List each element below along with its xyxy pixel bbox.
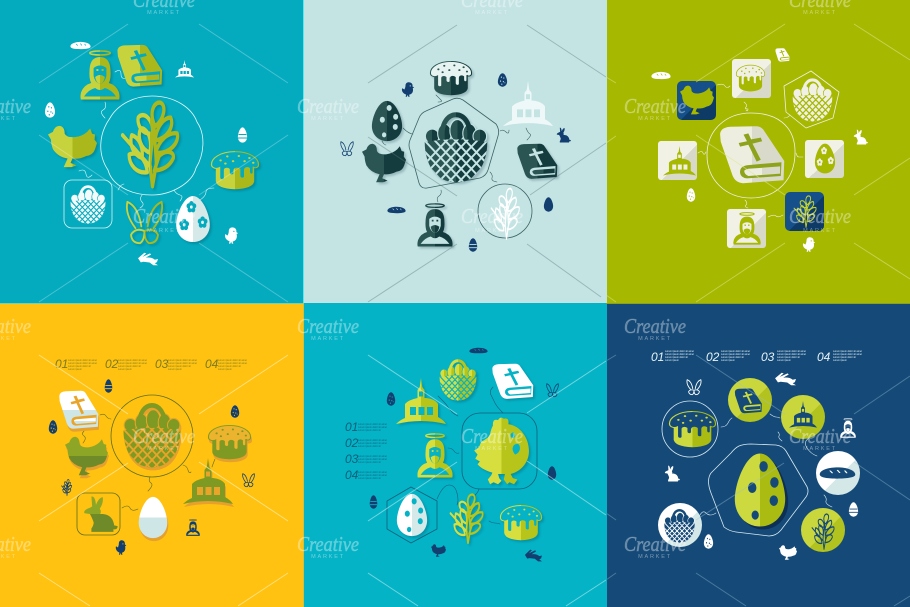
icon: egg — [548, 466, 556, 480]
icon: basket — [425, 361, 491, 404]
icon: hen — [779, 545, 797, 560]
box: cake — [732, 59, 771, 98]
icon: willow — [451, 495, 483, 543]
watermark row 3: MARKET — [475, 228, 509, 234]
watermark row 5: Creative — [461, 424, 523, 448]
item 02: Lorem ipsum — [721, 359, 735, 362]
item 03: Lorem ipsum dolor sit — [168, 365, 191, 368]
icon: willow — [61, 480, 72, 496]
icon: hen — [431, 544, 446, 557]
panel: teal willow branch — [0, 0, 303, 303]
icon: basket — [777, 80, 848, 125]
icon: chick — [225, 227, 238, 244]
item 02: Lorem ipsum dolor sit — [118, 365, 141, 368]
item 04 — [817, 350, 862, 364]
watermark row 2: Creative — [624, 94, 686, 118]
watermark row 3: Creative — [461, 204, 523, 228]
item 01: Lorem ipsum dolor sit — [358, 429, 381, 432]
frame with basket — [57, 180, 119, 228]
item 02: Lorem ipsum dolor sit amet — [721, 353, 750, 356]
item 02: Lorem ipsum dolor sit — [721, 356, 744, 359]
item 02 — [345, 436, 387, 450]
icon: rabbit — [557, 128, 571, 143]
item 03: Lorem ipsum dolor sit amet — [777, 350, 806, 353]
item 01: Lorem ipsum dolor sit amet — [665, 353, 694, 356]
item 02 — [706, 350, 750, 364]
item 04: Lorem ipsum dolor sit amet — [833, 353, 862, 356]
outline: central hexagon — [409, 98, 499, 188]
frame: hexagon — [708, 444, 808, 536]
box: Jesus — [727, 209, 766, 248]
box: church — [658, 141, 697, 180]
frame with rabbit — [77, 493, 120, 535]
item 03 — [761, 350, 806, 364]
watermark row 2: MARKET — [311, 116, 345, 122]
watermark row 3: MARKET — [803, 228, 837, 234]
item 01 — [345, 420, 387, 434]
item 02: 02 — [345, 436, 359, 450]
icon: Jesus — [186, 519, 200, 536]
icon: bunny — [243, 474, 254, 487]
icon: chick — [402, 82, 414, 97]
icon: egg — [387, 392, 395, 406]
watermark row 3: Creative — [133, 204, 195, 228]
outline: willow circle — [478, 184, 532, 238]
watermark row 4: Creative — [297, 314, 359, 338]
icon: willow — [491, 189, 519, 239]
icon: small book — [775, 48, 789, 62]
watermark row 4: Creative — [624, 314, 686, 338]
icon: bunny — [547, 384, 558, 397]
item 03: 03 — [155, 357, 169, 371]
item 01: 01 — [55, 357, 68, 371]
item 02: Lorem ipsum dolor sit amet — [721, 350, 750, 353]
icon: bunny — [341, 142, 353, 156]
item 03: Lorem ipsum — [777, 359, 791, 362]
icon: church — [503, 81, 553, 126]
watermark row 3: MARKET — [147, 228, 181, 234]
item 01: 01 — [651, 350, 664, 364]
icon: small egg — [45, 102, 55, 118]
watermark row 2: MARKET — [638, 116, 672, 122]
watermark row 1 — [133, 0, 851, 16]
watermark row 4: MARKET — [638, 336, 672, 342]
item 03: Lorem ipsum dolor sit — [777, 356, 800, 359]
icon: chick — [116, 540, 126, 555]
watermark row 3: Creative — [789, 204, 851, 228]
panel: green bible — [606, 0, 910, 303]
item 02: Lorem ipsum dolor sit amet — [358, 442, 387, 445]
item 04: Lorem ipsum dolor sit — [358, 477, 381, 480]
icon: bible — [117, 45, 162, 87]
watermark row 5: MARKET — [803, 446, 837, 452]
box: willow — [785, 192, 824, 231]
icon: cake — [669, 412, 716, 447]
item 03 — [345, 452, 387, 466]
item 01: 01 — [345, 420, 358, 434]
icon: big bible — [720, 126, 784, 183]
outline: central rounded frame — [707, 113, 795, 198]
icon: decorated egg — [176, 196, 210, 242]
icon: small church — [175, 60, 194, 77]
watermark row 6 — [0, 532, 686, 560]
item 04: 04 — [205, 357, 219, 371]
connectors — [82, 414, 215, 510]
item 01: Lorem ipsum dolor sit — [68, 365, 91, 368]
item 03: Lorem ipsum — [168, 368, 182, 371]
legend 01-04 — [55, 357, 247, 371]
legend 01-04 — [345, 420, 387, 482]
icon: egg — [397, 494, 427, 536]
item 04: 04 — [817, 350, 831, 364]
icon: willow branch — [123, 103, 178, 186]
item 01: Lorem ipsum — [665, 359, 679, 362]
watermark row 1: MARKET — [147, 10, 181, 16]
icon: bread — [387, 207, 406, 213]
panel background — [0, 0, 303, 303]
icon: egg — [704, 534, 713, 549]
item 04: Lorem ipsum dolor sit amet — [833, 350, 862, 353]
watermark row 6: MARKET — [311, 554, 345, 560]
item 04: 04 — [345, 468, 359, 482]
icon: spotted egg — [372, 101, 402, 141]
icon: church — [183, 458, 233, 504]
circle: bible — [728, 378, 772, 422]
icon: dotted egg — [498, 73, 507, 87]
item 01: Lorem ipsum dolor sit amet — [665, 350, 694, 353]
item 02: 02 — [706, 350, 720, 364]
box: egg — [805, 140, 844, 178]
item 01 — [651, 350, 694, 364]
item 02: Lorem ipsum dolor sit amet — [118, 359, 147, 362]
icon: rabbit — [854, 130, 868, 145]
item 04 — [205, 357, 247, 371]
watermark row 5 — [133, 424, 851, 452]
item 01 — [55, 357, 97, 371]
icon: Jesus — [417, 204, 453, 247]
panel background — [303, 303, 606, 607]
item 01: Lorem ipsum dolor sit amet — [68, 362, 97, 365]
icon: hen — [48, 126, 97, 167]
icon: Jesus — [80, 51, 120, 100]
icon: bunny — [127, 202, 162, 243]
item 01: Lorem ipsum dolor sit amet — [68, 359, 97, 362]
item 03: 03 — [761, 350, 775, 364]
item 02: Lorem ipsum — [118, 368, 132, 371]
watermark row 2 — [0, 94, 686, 122]
icon: Jesus — [840, 418, 856, 438]
watermark row 5: Creative — [789, 424, 851, 448]
icon: basket — [400, 115, 512, 187]
watermark row 6: MARKET — [638, 554, 672, 560]
icon: hen — [65, 437, 108, 475]
item 03: Lorem ipsum dolor sit amet — [168, 359, 197, 362]
panel background — [606, 303, 910, 607]
icon: hen — [362, 144, 406, 182]
panel: navy egg — [606, 303, 910, 607]
connectors — [79, 70, 214, 208]
connectors — [382, 95, 531, 202]
icon: big egg — [735, 454, 785, 526]
watermark row 2: Creative — [297, 94, 359, 118]
icon: cake — [500, 505, 542, 540]
item 04: Lorem ipsum dolor sit — [218, 365, 241, 368]
icon: Easter cake — [211, 152, 259, 189]
icon: egg — [49, 420, 57, 434]
watermark row 1: MARKET — [803, 10, 837, 16]
item 03: Lorem ipsum dolor sit amet — [777, 353, 806, 356]
icon: egg — [139, 497, 167, 538]
item 04: Lorem ipsum dolor sit amet — [358, 471, 387, 474]
panel: yellow basket — [0, 303, 303, 607]
outline: central blob frame — [101, 96, 203, 195]
watermark row 4 — [0, 314, 686, 342]
icon: bread — [651, 72, 671, 79]
item 01: Lorem ipsum dolor sit amet — [358, 426, 387, 429]
connectors — [437, 387, 503, 524]
icon: rabbit — [665, 466, 680, 481]
connectors — [698, 414, 832, 519]
item 04: Lorem ipsum dolor sit — [833, 356, 856, 359]
icon: egg — [231, 405, 239, 418]
icon: bible — [517, 144, 557, 179]
item 04: Lorem ipsum — [218, 368, 232, 371]
item 03: Lorem ipsum dolor sit amet — [168, 362, 197, 365]
icon: church — [396, 378, 446, 424]
watermark row 6: Creative — [624, 532, 686, 556]
panel background — [0, 303, 303, 607]
icons — [48, 45, 259, 243]
panel: teal chick — [303, 303, 606, 607]
icon: running rabbit — [775, 373, 796, 385]
icon: chick — [803, 237, 815, 252]
outline: basket hexagon — [784, 71, 839, 128]
item 04: Lorem ipsum dolor sit amet — [218, 359, 247, 362]
frame: cake circle — [662, 401, 718, 457]
circle: willow — [801, 508, 845, 552]
icon: rabbit — [525, 550, 542, 561]
icon: egg — [687, 188, 695, 202]
item 04: Lorem ipsum dolor sit amet — [358, 474, 387, 477]
icon: egg — [544, 197, 553, 212]
icon: bunny — [687, 380, 701, 395]
icon: cake — [208, 425, 251, 459]
watermark row 5: Creative — [133, 424, 195, 448]
watermark row 3 — [133, 204, 851, 234]
watermark row 4: MARKET — [311, 336, 345, 342]
circle: bread — [816, 451, 860, 495]
item 04 — [345, 468, 387, 482]
item 02: Lorem ipsum dolor sit — [358, 445, 381, 448]
icon: striped egg — [469, 238, 477, 252]
item 01: Lorem ipsum — [68, 368, 82, 371]
icon: basket — [101, 405, 203, 472]
icon: cake — [430, 61, 472, 95]
item 03: Lorem ipsum dolor sit amet — [358, 455, 387, 458]
icon: striped egg — [105, 379, 112, 393]
circle: church — [781, 395, 825, 439]
small white icons — [45, 42, 247, 265]
item 02: 02 — [105, 357, 119, 371]
frame: rounded square — [462, 413, 537, 489]
circle: basket — [652, 503, 707, 547]
watermark row 1: MARKET — [475, 10, 509, 16]
icon: bible — [59, 391, 98, 429]
watermark row 6: Creative — [297, 532, 359, 556]
small navy icons — [341, 73, 571, 252]
icon: bread — [70, 42, 91, 49]
watermark row 5: MARKET — [147, 446, 181, 452]
connectors — [698, 84, 803, 217]
icon: bible — [492, 364, 533, 399]
icon: striped egg — [370, 495, 377, 509]
panel background — [606, 0, 910, 303]
item 04: Lorem ipsum dolor sit amet — [218, 362, 247, 365]
outline: central circle — [111, 395, 193, 477]
icon: running rabbit — [138, 253, 158, 265]
icon: Jesus — [417, 434, 453, 478]
item 03 — [155, 357, 197, 371]
icon: large chick — [474, 418, 529, 484]
item 02 — [105, 357, 147, 371]
frame: hexagon — [387, 487, 437, 543]
icon: striped egg — [238, 127, 247, 143]
item 01: Lorem ipsum dolor sit — [665, 356, 688, 359]
watermark row 5: MARKET — [475, 446, 509, 452]
panel: pale basket — [303, 0, 606, 303]
icon: bread — [469, 348, 488, 353]
item 03: Lorem ipsum dolor sit amet — [358, 458, 387, 461]
item 03: Lorem ipsum dolor sit — [358, 461, 381, 464]
item 01: Lorem ipsum dolor sit amet — [358, 423, 387, 426]
item 04: Lorem ipsum — [833, 359, 847, 362]
icon: striped egg — [849, 502, 858, 517]
item 02: Lorem ipsum dolor sit amet — [118, 362, 147, 365]
box: hen — [677, 81, 716, 120]
panel background — [303, 0, 606, 303]
item 02: Lorem ipsum dolor sit amet — [358, 439, 387, 442]
item 03: 03 — [345, 452, 359, 466]
legend 01-04 — [651, 350, 862, 364]
